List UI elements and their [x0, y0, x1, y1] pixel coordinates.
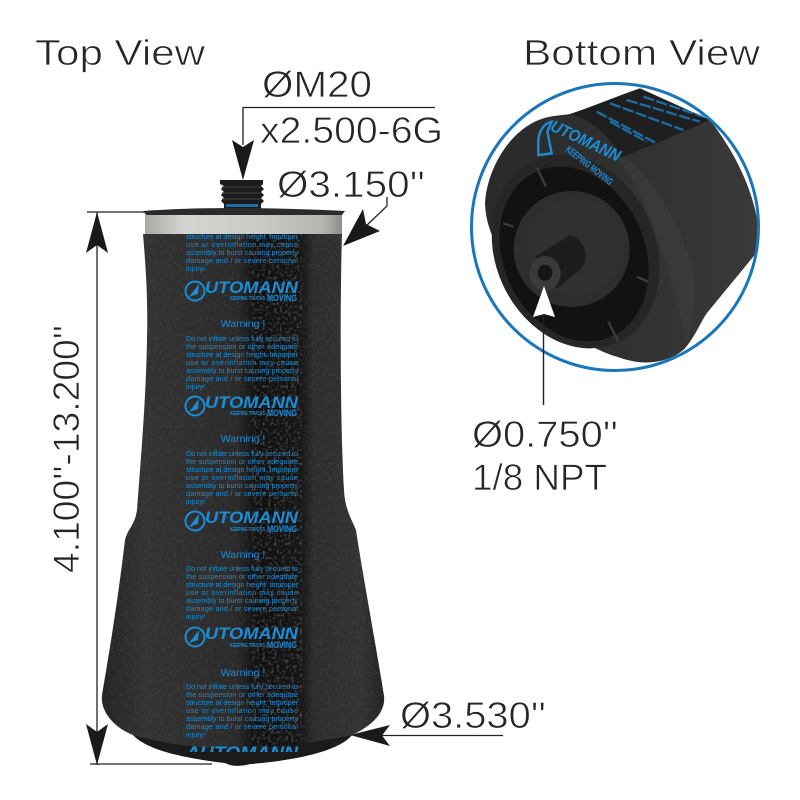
- label: warning 1: Do not inflate unless fully secured to: [186, 334, 298, 343]
- leader line: [542, 310, 544, 405]
- white arrowhead: [533, 286, 555, 317]
- dimension: 3.150 diameter: [277, 164, 425, 246]
- label: logo 3: MOVING: [267, 524, 297, 534]
- label: warning 2: damage and / or severe personal: [186, 489, 298, 498]
- printed label text: [185, 232, 299, 762]
- label: logo 4: KEEPING TRUCKS: [230, 643, 265, 649]
- label: logo 2: UTOMANN: [205, 393, 299, 412]
- arrowhead: [232, 140, 254, 180]
- label fragment: top warning: [186, 232, 299, 273]
- label: 4.100''-13.200'': [46, 325, 87, 573]
- label: warning 2: the suspension or other adequate: [186, 457, 298, 466]
- bottom bumper: [133, 735, 352, 766]
- label: warning 4: the suspension or other adequate: [186, 690, 298, 699]
- label: logo 2: MOVING: [267, 408, 297, 418]
- label: logo 4: UTOMANN: [205, 624, 299, 643]
- port collar: [529, 256, 561, 291]
- label: warning 4: injury!: [186, 730, 205, 739]
- label: warning 2: structure at design height. Improper: [186, 465, 299, 474]
- label: warning 2: [186, 433, 299, 506]
- bottom arrowhead: [86, 724, 108, 765]
- end cavity: [500, 166, 648, 342]
- title: top view: Top View: [35, 32, 206, 73]
- dimension: 0.750 port: [472, 286, 618, 498]
- label: warning 1: [186, 318, 299, 391]
- air spring product image: [95, 180, 390, 769]
- rounded shoulder highlight: [617, 157, 695, 343]
- label: warning 4: use or overinflation may cause: [186, 706, 298, 715]
- title: bottom view: Bottom View: [523, 32, 761, 73]
- rubber bellows body: [102, 234, 384, 766]
- label: warning 1: the suspension or other adequate: [186, 342, 298, 351]
- port hole: [538, 265, 552, 281]
- label: logo 2: KEEPING TRUCKS: [230, 411, 265, 417]
- top cap plate: [143, 208, 345, 216]
- label: warning 2: assembly to burst causing property: [186, 481, 298, 490]
- label: logo 3: [184, 510, 298, 532]
- label fragment: top warning: damage and / or severe personal: [186, 256, 298, 265]
- hub: [514, 191, 630, 307]
- label: logo 1: UTOMANN: [205, 278, 299, 297]
- label: Ø3.150'': [277, 164, 425, 205]
- dimension: overall height: [46, 212, 212, 765]
- label: warning 3: [186, 549, 299, 621]
- silver crimp ring: [145, 215, 342, 235]
- label: warning 3: damage and / or severe personal: [186, 604, 298, 613]
- printed band on cylinder: [570, 88, 710, 157]
- stem: [535, 235, 586, 288]
- label: warning 4: [186, 667, 299, 739]
- label: warning 2: injury!: [186, 497, 205, 506]
- label: warning 3: structure at design height. Improper: [186, 580, 299, 589]
- label: logo 1: KEEPING TRUCKS: [230, 296, 265, 302]
- label: logo 3: KEEPING TRUCKS: [230, 527, 265, 533]
- label: warning 1: assembly to burst causing property: [186, 366, 298, 375]
- label: logo 4: [184, 626, 298, 648]
- dimension: 3.530 diameter: [350, 695, 546, 746]
- tagline: KEEPING MOVING: [563, 144, 615, 188]
- band text: [597, 97, 703, 143]
- label: warning 1: use or overinflation may cause: [186, 358, 298, 367]
- label: logo 3: UTOMANN: [205, 508, 299, 527]
- bellows texture: [95, 234, 390, 769]
- label: warning 1: injury!: [186, 382, 205, 391]
- label: thread: 1/8 NPT: [472, 457, 607, 498]
- label fragment: top warning: structure at design height. Improper: [186, 232, 299, 241]
- logo text: UTOMANN: [548, 116, 624, 166]
- ribs: [503, 167, 648, 342]
- label: logo 2: [184, 396, 298, 416]
- panel: bottom view circle: [461, 84, 759, 376]
- label: Ø3.530'': [400, 695, 546, 736]
- label: warning 1: Warning !: [221, 318, 265, 330]
- label: logo 1: [184, 280, 298, 302]
- label: M20 line 1: ØM20: [262, 64, 372, 105]
- top arrowhead: [86, 212, 108, 253]
- label fragment: top warning: use or overinflation may cause: [186, 240, 298, 249]
- label: warning 4: Warning !: [221, 667, 265, 679]
- logo icon: [538, 122, 552, 155]
- label: warning 3: assembly to burst causing property: [186, 596, 298, 605]
- label fragment: top warning: injury!: [186, 264, 205, 273]
- label: warning 2: Warning !: [221, 433, 265, 445]
- label: warning 3: the suspension or other adequate: [186, 572, 298, 581]
- leader line: [380, 734, 503, 736]
- hub face: [528, 198, 624, 295]
- leader line: [243, 108, 435, 145]
- shiny centre strip: [252, 234, 302, 754]
- label: warning 2: use or overinflation may cause: [186, 473, 298, 482]
- dimension: M20 thread: [232, 64, 443, 180]
- label: warning 3: Warning !: [221, 549, 265, 561]
- label: warning 4: damage and / or severe personal: [186, 722, 298, 731]
- label: warning 3: injury!: [186, 612, 205, 621]
- leader line: [365, 197, 387, 227]
- label: logo 5 clipped: AUTOMANN: [185, 743, 299, 762]
- label: diameter: Ø0.750'': [472, 414, 618, 455]
- arrowhead: [350, 725, 390, 746]
- label: warning 4: structure at design height. Improper: [186, 698, 299, 707]
- label: logo 1: MOVING: [267, 293, 297, 303]
- end ring: [492, 155, 660, 348]
- circle outline: [472, 84, 758, 370]
- spring body seen from below: [485, 88, 759, 362]
- label: warning 2: Do not inflate unless fully secured to: [186, 449, 298, 458]
- label: warning 1: damage and / or severe personal: [186, 374, 298, 383]
- label: warning 4: assembly to burst causing property: [186, 714, 298, 723]
- label: M20 line 2: x2.500-6G: [260, 110, 443, 151]
- extension lines: [87, 212, 212, 765]
- label: warning 3: use or overinflation may cause: [186, 588, 298, 597]
- bottom view photo: [485, 88, 757, 362]
- label: warning 1: structure at design height. Improper: [186, 350, 299, 359]
- label: warning 3: Do not inflate unless fully secured to: [186, 564, 298, 573]
- label fragment: top warning: assembly to burst causing property: [186, 248, 298, 257]
- threaded stud: [220, 180, 264, 210]
- label: warning 4: Do not inflate unless fully secured to: [186, 682, 298, 691]
- arrowhead: [343, 209, 380, 246]
- label: logo 4: MOVING: [267, 640, 297, 650]
